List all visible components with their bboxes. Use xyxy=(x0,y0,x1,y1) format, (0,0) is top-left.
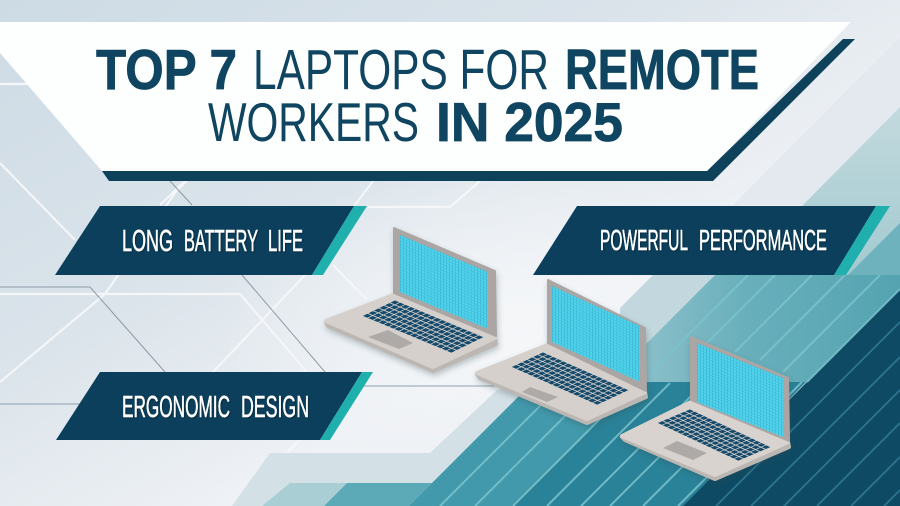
background glow xyxy=(220,160,820,500)
label: long battery life: LIFE xyxy=(268,223,303,258)
label: long battery life: LONG xyxy=(122,223,173,258)
label: powerful performance: POWERFUL xyxy=(600,225,688,257)
diagonal stripes: navy xyxy=(716,322,900,506)
label: long battery life xyxy=(55,206,367,275)
upper right pale teal band xyxy=(740,107,900,275)
title line two: WORKERS xyxy=(208,91,419,153)
upper left pale band beside the middle laptop xyxy=(620,275,715,345)
hexagon network lines xyxy=(0,84,520,506)
title line one: TOP 7 xyxy=(96,38,237,102)
diagonal stripes: teal xyxy=(440,275,900,506)
title line one xyxy=(96,38,759,102)
lower band light teal xyxy=(262,483,347,506)
label: ergonomic design xyxy=(56,372,373,440)
lower pale band xyxy=(232,384,645,506)
title line two: IN 2025 xyxy=(436,91,623,153)
banner shadow xyxy=(102,39,855,181)
label: ergonomic design: DESIGN xyxy=(241,389,309,424)
teal field xyxy=(409,381,670,506)
label: powerful performance xyxy=(533,206,890,275)
upper teal panel xyxy=(645,275,900,382)
icon: laptop one xyxy=(326,228,496,371)
background diagonal sheen xyxy=(733,37,900,205)
title line one: LAPTOPS FOR xyxy=(253,38,549,102)
icon: laptop three xyxy=(622,337,789,479)
title line two xyxy=(208,91,623,153)
lower band teal xyxy=(324,483,432,506)
label: long battery life: BATTERY xyxy=(184,223,258,258)
navy field xyxy=(683,289,900,506)
icon: laptop two xyxy=(477,280,646,423)
darker teal field xyxy=(513,381,807,506)
banner panel xyxy=(0,22,851,171)
label: ergonomic design: ERGONOMIC xyxy=(122,389,230,424)
title banner xyxy=(0,22,855,181)
upper right mid teal band xyxy=(848,223,900,275)
title line one: REMOTE xyxy=(565,38,759,102)
